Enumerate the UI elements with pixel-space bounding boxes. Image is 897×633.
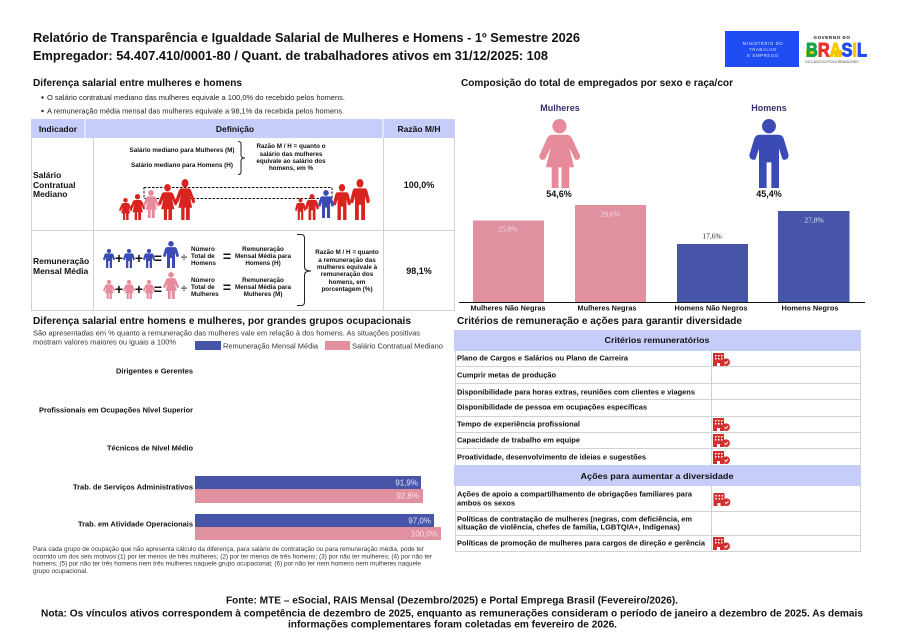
row: salário contratual mediano: Contratual: [33, 180, 76, 190]
heading: Diferença salarial entre homens e mulheres, por grandes grupos ocupacionais: [33, 316, 411, 327]
footnote: homens; (5) por não ter três homens nem três mulheres naquele grupo ocupacional; (6) por não ter nem homens nem mulheres naquele: [33, 560, 421, 568]
figure: mulheres: 54,6%: [546, 189, 572, 199]
icons: ações adotadas: [713, 493, 730, 550]
figure: homens: Homens: [751, 103, 787, 113]
bar chart: 17,6%: [702, 232, 722, 240]
table header: [31, 119, 455, 138]
legend: Salário Contratual Mediano: [352, 342, 443, 350]
footer: fonte e nota: Nota: Os vínculos ativos correspondem à competência de dezembro de 2025, enquanto as remunerações consideram o período de janeiro a dezembro de 2025. As demais: [41, 608, 864, 620]
row: remuneração mensal média: +: [135, 250, 143, 266]
footer: fonte e nota: [41, 596, 864, 630]
logo: ministério: [725, 31, 799, 67]
row: remuneração mensal média: ÷: [181, 252, 187, 264]
row: remuneração mensal média: porcentagem (%): [321, 286, 373, 293]
panel: diferença salarial: [31, 78, 455, 310]
row: remuneração mensal média: Mulheres (M): [244, 291, 282, 298]
row: salário contratual mediano: Salário mediano para Homens (H): [131, 162, 233, 169]
heading: Critérios de remuneração e ações para garantir diversidade: [457, 316, 742, 327]
row: remuneração mensal média: Homens (H): [245, 260, 281, 267]
legend: Remuneração Mensal Média: [223, 342, 319, 350]
chart: categorias e barras: Trab. em Atividade Operacionais: [78, 522, 193, 528]
table header: Indicador: [39, 124, 78, 134]
bar chart: [459, 205, 865, 312]
chart: categorias e barras: 92,8%: [396, 492, 419, 500]
bar chart: Mulheres Negras: [578, 306, 637, 312]
heading: Composição do total de empregados por sexo e raça/cor: [461, 78, 733, 89]
row: remuneração mensal média: mulheres equivale à: [317, 264, 378, 271]
chart: categorias e barras: Trab. de Serviços Administrativos: [73, 484, 193, 492]
row: salário contratual mediano: Razão M / H = quanto o: [256, 143, 326, 150]
chart: categorias e barras: [39, 368, 441, 540]
row: remuneração mensal média: a remuneração das: [318, 257, 376, 264]
bar chart: 27,8%: [804, 216, 824, 224]
chart: categorias e barras: 97,0%: [408, 516, 431, 526]
row: salário contratual mediano: Salário mediano para Mulheres (M): [130, 147, 234, 154]
header: ações para aumentar a diversidade: Ações para aumentar a diversidade: [580, 471, 734, 481]
description: São apresentadas em % quanto a remuneração das mulheres vale em relação à dos homens. As situações positivas: [33, 328, 420, 338]
row: salário contratual mediano: Mediano: [33, 189, 67, 199]
row: remuneração mensal média: +: [115, 281, 123, 297]
description: mostram valores maiores ou iguais a 100%: [33, 338, 177, 346]
bar chart: Homens Não Negros: [674, 306, 748, 312]
row: remuneração mensal média: Número: [191, 246, 215, 253]
ações rows: situação de violência, chefes de família, LGBTQIA+, Indígenas): [457, 524, 680, 532]
footer: fonte e nota: Fonte: MTE – eSocial, RAIS Mensal (Dezembro/2025) e Portal Emprega Brasil (Fevereiro/2026).: [226, 596, 678, 606]
row: remuneração mensal média: Remuneração: [242, 246, 284, 253]
panel: composição por sexo e raça/cor: [459, 78, 865, 312]
row: remuneração mensal média: Mensal Média para: [235, 253, 291, 260]
value: 100,0%: 100,0%: [404, 180, 434, 190]
row: remuneração mensal média: Total de: [191, 284, 215, 291]
chart: categorias e barras: 91,9%: [395, 478, 418, 488]
bullet texts: O salário contratual mediano das mulheres equivale a 100,0% do recebido pelos homens.: [47, 93, 345, 102]
description: [33, 328, 420, 346]
table header: Razão M/H: [398, 124, 440, 134]
chart: categorias e barras: Dirigentes e Gerentes: [116, 368, 193, 376]
row: remuneração mensal média: =: [154, 250, 162, 266]
footnote: ocorrido um dos seis motivos:(1) por ter menos de três mulheres; (2) por ter menos de três homens; (3) por não ter mulheres; (4) por não ter: [33, 554, 432, 560]
header: ações para aumentar a diversidade: [454, 465, 861, 486]
bar chart: Homens Negros: [782, 306, 839, 312]
row: remuneração mensal média: Remuneração: [242, 277, 284, 284]
header: critérios remuneratórios: Critérios remuneratórios: [604, 335, 710, 345]
row: remuneração mensal média: +: [135, 281, 143, 297]
ações rows: ambos os sexos: [457, 500, 515, 508]
ações rows: Políticas de contratação de mulheres (negras, com deficiência, em: [457, 516, 692, 524]
title: [33, 31, 580, 63]
footer: fonte e nota: informações complementares foram coletadas em fevereiro de 2026.: [288, 620, 617, 630]
row: remuneração mensal média: Número: [191, 277, 215, 284]
logo: governo do brasil: BRASIL: [806, 40, 867, 62]
value: 98,1%: 98,1%: [406, 266, 432, 276]
critérios rows: Plano de Cargos e Salários ou Plano de Carreira: [457, 356, 628, 362]
bar chart: 25,0%: [498, 224, 518, 234]
logo: ministério: E EMPREGO: [747, 53, 779, 58]
header: critérios remuneratórios: [454, 330, 861, 351]
critérios rows: Cumprir metas de produção: [457, 372, 556, 380]
logo: ministério: TRABALHO: [749, 47, 777, 52]
chart: categorias e barras: Técnicos de Nível Médio: [107, 446, 193, 452]
title: Empregador: 54.407.410/0001-80 / Quant. de trabalhadores ativos em 31/12/2025: 108: [33, 49, 548, 63]
critérios rows: Tempo de experiência profissional: [457, 422, 580, 428]
critérios rows: Disponibilidade para horas extras, reuniões com clientes e viagens: [457, 390, 695, 396]
critérios rows: Capacidade de trabalho em equipe: [457, 438, 580, 444]
critérios rows: Disponibilidade de pessoa em ocupações específicas: [457, 404, 647, 412]
row: remuneração mensal média: +: [115, 250, 123, 266]
row: salário contratual mediano: homens, em %: [269, 165, 313, 172]
logo: ministério: MINISTÉRIO DO: [743, 41, 783, 46]
footnote: grupo ocupacional.: [33, 568, 88, 575]
row: remuneração mensal média: Mensal Média para: [235, 284, 291, 291]
legend: [195, 341, 443, 350]
bar chart: Mulheres Não Negras: [470, 306, 546, 312]
ações rows: Ações de apoio a compartilhamento de obrigações familiares para: [457, 492, 692, 498]
row: remuneração mensal média: Mensal Média: [33, 266, 89, 276]
bar chart: 29,6%: [600, 210, 620, 218]
chart: categorias e barras: 100,0%: [411, 530, 438, 538]
footnote: [33, 546, 432, 575]
critérios rows: Proatividade, desenvolvimento de ideias e sugestões: [457, 454, 646, 462]
icons: critérios adotados: [713, 353, 730, 464]
figure: homens: [749, 103, 789, 199]
row: salário contratual mediano: Salário: [33, 170, 61, 180]
row: remuneração mensal média: =: [223, 279, 231, 295]
ações rows: [457, 492, 705, 548]
panel: grandes grupos ocupacionais: [33, 316, 443, 575]
logo: governo do brasil: GOVERNO DO: [813, 35, 851, 40]
footnote: Para cada grupo de ocupação que não apresenta cálculo da diferença, para salário de contratação ou para remuneração média, pode ter: [33, 546, 424, 553]
bullet texts: [41, 93, 345, 116]
panel: critérios e ações: [454, 316, 861, 552]
figure: mulheres: [539, 103, 580, 199]
row: salário contratual mediano: [33, 142, 370, 220]
row: remuneração mensal média: Razão M / H = quanto: [315, 249, 379, 256]
heading: Diferença salarial entre mulheres e homens: [33, 78, 242, 89]
figure: homens: 45,4%: [756, 189, 782, 199]
row: remuneração mensal média: =: [154, 281, 162, 297]
row: remuneração mensal média: Total de: [191, 253, 215, 260]
row: remuneração mensal média: =: [223, 248, 231, 264]
row: remuneração mensal média: Mulheres: [191, 291, 219, 298]
logo: governo do brasil: DO LADO DO POVO BRASILEIRO: [805, 60, 859, 64]
title: Relatório de Transparência e Igualdade Salarial de Mulheres e Homens - 1º Semestre 2026: [33, 31, 580, 45]
row: remuneração mensal média: homens, em: [329, 279, 366, 286]
ações rows: Políticas de promoção de mulheres para cargos de direção e gerência: [457, 540, 705, 548]
table header: Definição: [216, 124, 254, 134]
bullet texts: A remuneração média mensal das mulheres equivale a 98,1% da recebida pelos homens.: [47, 106, 344, 116]
table frame: [455, 351, 861, 552]
row: remuneração mensal média: Remuneração: [33, 256, 89, 266]
row: salário contratual mediano: equivale ao salário dos: [256, 158, 326, 165]
chart: categorias e barras: Profissionais em Ocupações Nível Superior: [39, 408, 193, 414]
row: salário contratual mediano: salário das mulheres: [260, 151, 323, 158]
row: remuneração mensal média: Homens: [191, 260, 216, 267]
row: remuneração mensal média: [33, 234, 379, 306]
row: remuneração mensal média: remuneração dos: [321, 271, 374, 278]
row: remuneração mensal média: ÷: [181, 283, 187, 295]
critérios rows: [457, 356, 695, 462]
figure: mulheres: Mulheres: [540, 103, 580, 113]
